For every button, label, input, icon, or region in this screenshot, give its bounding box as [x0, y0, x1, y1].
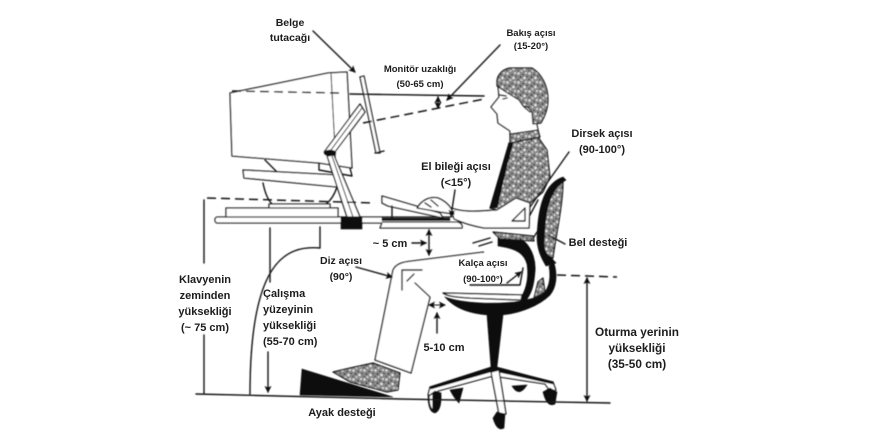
arrow: seat clearance	[429, 305, 445, 333]
shirt torso	[490, 137, 550, 210]
label: keyboard height: yüksekliği	[178, 306, 232, 318]
arrow: knee angle	[356, 267, 430, 297]
floor line	[196, 394, 610, 403]
label: work surface height: yüksekliği	[263, 320, 316, 332]
label: work surface height: (55-70 cm)	[263, 336, 318, 348]
arrow: lumbar support	[548, 235, 565, 244]
label: seat clearance: 5-10 cm	[424, 342, 465, 354]
label: wrist angle: (<15°)	[441, 177, 472, 189]
label: foot rest: Ayak desteği	[308, 407, 376, 419]
forearm	[451, 198, 530, 228]
label: hip angle: (90-100°)	[463, 274, 503, 285]
label: work surface height: Çalışma	[263, 288, 305, 300]
label: five cm: ~ 5 cm	[373, 238, 407, 250]
icon: elbow angle triangle	[512, 208, 525, 221]
chair base legs	[428, 367, 556, 396]
gaze lines	[232, 91, 484, 123]
label: lumbar support: Bel desteği	[569, 237, 627, 249]
arrow: 5 cm clearance	[412, 230, 429, 255]
illustration: keyboard tray	[382, 196, 450, 220]
label: seat height: yüksekliği	[608, 341, 666, 355]
trouser leg	[375, 252, 484, 373]
arrow: document holder	[313, 31, 355, 72]
keyboard height line	[204, 198, 375, 394]
label: knee angle: (90°)	[330, 271, 352, 283]
illustration: foot rest	[300, 369, 393, 397]
label: seat height: (35-50 cm)	[608, 357, 666, 371]
label: document holder: Belge	[276, 17, 304, 29]
icon: document holder arm	[324, 76, 384, 217]
label: document holder: tutacağı	[270, 32, 310, 44]
head and hair	[491, 85, 538, 135]
label: keyboard height: zeminden	[180, 290, 231, 302]
label: viewing angle: (15-20°)	[514, 41, 548, 52]
arrow: seat height	[557, 275, 617, 401]
arrow: elbow angle	[530, 152, 569, 207]
collar	[510, 130, 540, 143]
label: keyboard height: (~ 75 cm)	[181, 322, 229, 334]
illustration: office chair	[428, 177, 566, 429]
label: work surface height: yüzeyinin	[263, 304, 313, 316]
label: elbow angle: (90-100°)	[579, 144, 625, 156]
label: knee angle: Diz açısı	[320, 255, 362, 267]
illustration: monitor on stand	[230, 72, 352, 209]
label: monitor distance: (50-65 cm)	[396, 79, 444, 90]
label: hip angle: Kalça açısı	[458, 258, 508, 269]
arrow: hip angle	[470, 268, 523, 285]
label: viewing angle: Bakış açısı	[506, 28, 556, 39]
hand	[417, 197, 454, 214]
label: keyboard height: Klavyenin	[179, 274, 231, 286]
shoe	[333, 363, 400, 392]
arrow: viewing angle	[447, 45, 500, 100]
label: monitor distance: Monitör uzaklığı	[384, 64, 456, 75]
arrow: wrist angle	[451, 190, 455, 216]
arrow: work surface height	[268, 228, 270, 392]
illustration: desk	[215, 208, 462, 394]
label: wrist angle: El bileği açısı	[421, 161, 491, 173]
label: seat height: Oturma yerinin	[595, 325, 679, 339]
illustration: seated person	[333, 68, 550, 392]
label: elbow angle: Dirsek açısı	[571, 128, 633, 140]
